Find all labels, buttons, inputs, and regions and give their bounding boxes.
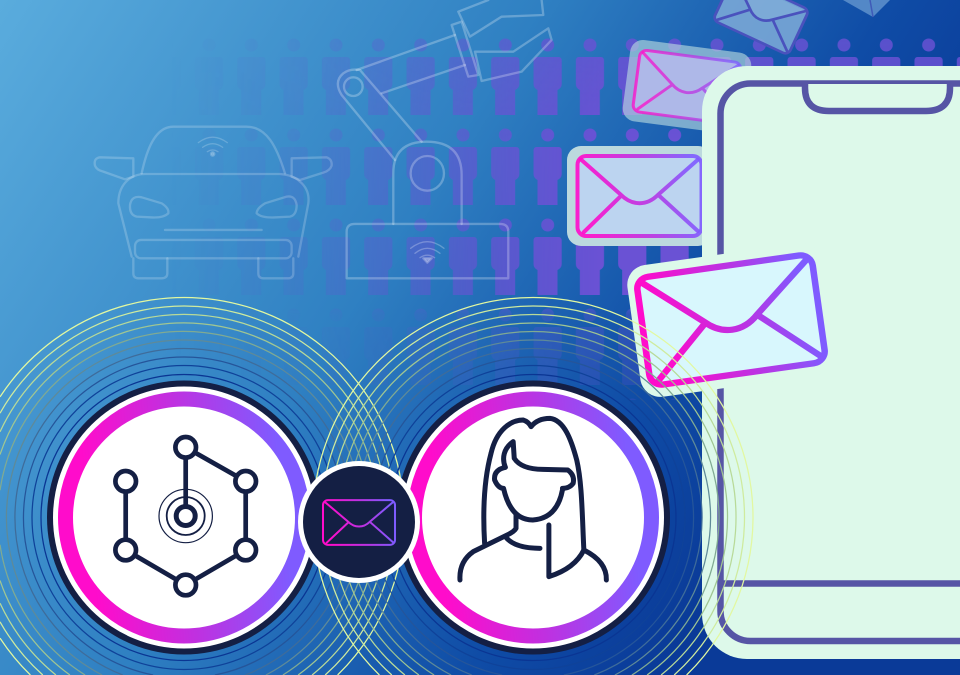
envelope: medium [567, 146, 712, 246]
phone body [702, 66, 960, 659]
envelope: drifting at top [713, 0, 809, 55]
icon: hexagon network [115, 437, 256, 595]
icon: small envelope [323, 500, 395, 545]
phone notch [805, 84, 950, 111]
phone home bar line [722, 580, 960, 587]
concentric signal rings: left [0, 297, 404, 675]
far envelope, top right corner [843, 0, 890, 17]
phone inner outline [720, 84, 960, 641]
badge: IoT network device [47, 380, 321, 654]
badge: person [396, 380, 670, 654]
phone [702, 66, 960, 659]
icon: woman with long hair [460, 418, 606, 580]
envelope: faded upper [621, 38, 753, 136]
envelope: large foreground [625, 241, 837, 399]
icon: connected car [95, 127, 332, 278]
people crowd pattern [294, 38, 960, 400]
icon: robot arm [338, 0, 552, 278]
concentric signal rings: right [313, 297, 753, 675]
badge: message connector [298, 461, 420, 583]
